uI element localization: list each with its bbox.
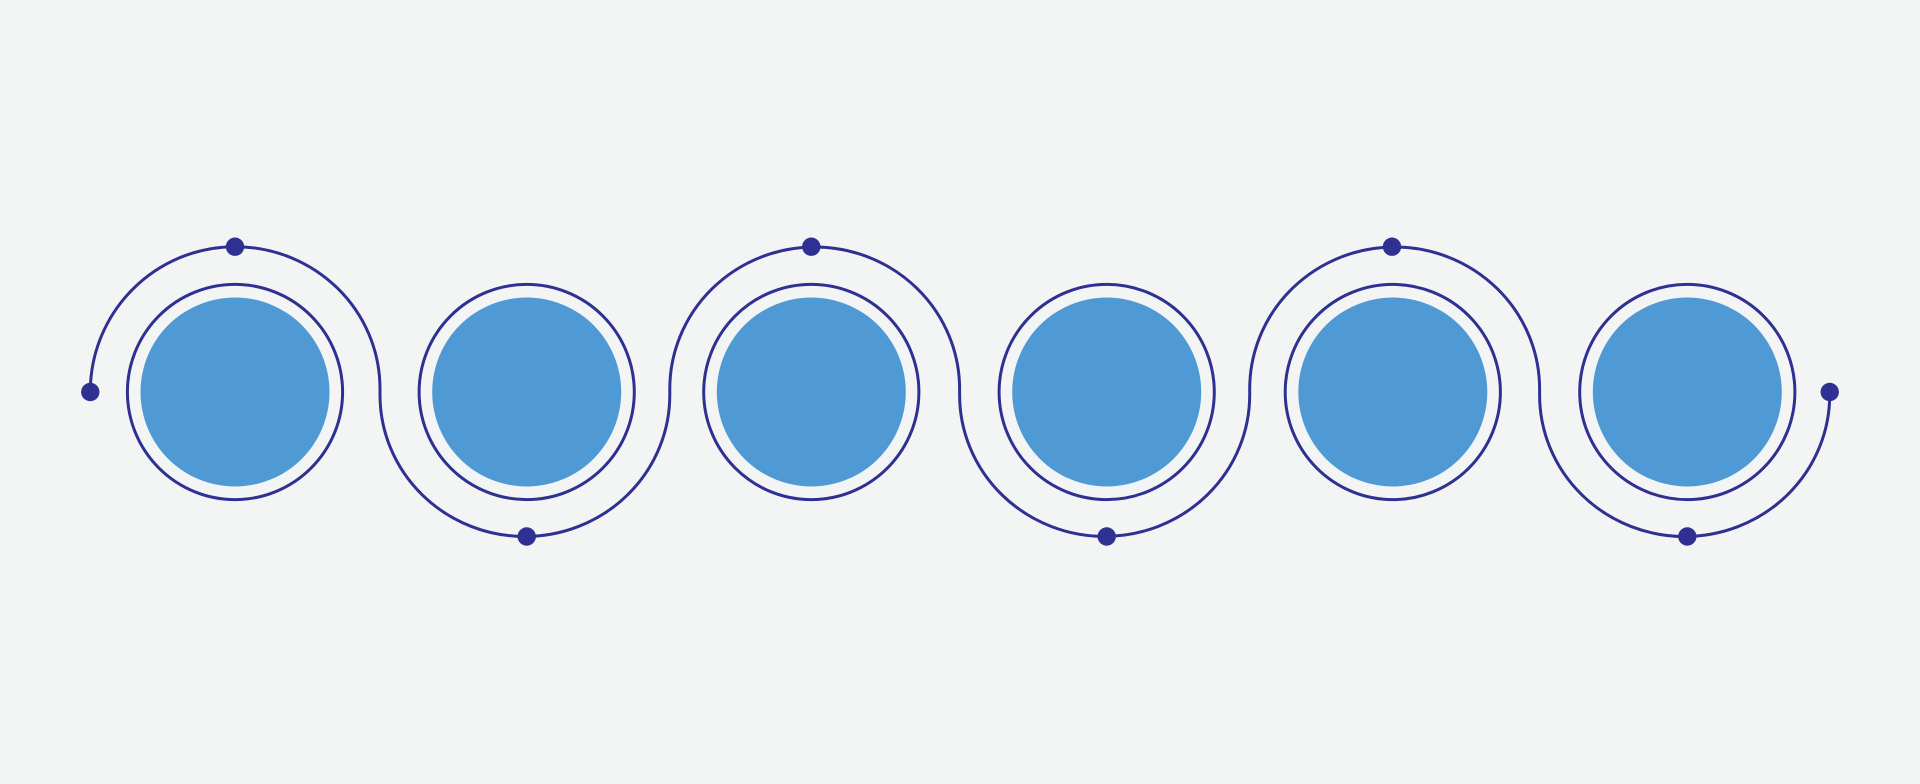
step 6 blue disc [1593,298,1782,486]
step 4 outer ring [999,284,1214,500]
step 2 outer ring [419,284,634,500]
bottom dot 4 [1098,527,1116,546]
bottom dot 2 [518,527,536,546]
winding connector line [90,247,1830,536]
step 1 circle [127,284,343,500]
step 6 outer ring [1580,284,1795,500]
step 6 circle [1580,284,1795,500]
top dot 3 [802,238,820,256]
step 5 circle [1285,284,1500,500]
bottom dot 6 [1678,527,1697,546]
step 2 circle [419,284,634,500]
step 3 circle [704,284,919,500]
step 5 outer ring [1285,284,1500,500]
start dot [81,383,100,401]
step 4 circle [999,284,1214,500]
step 5 blue disc [1298,298,1487,486]
step 3 blue disc [717,298,906,486]
top dot 1 [226,238,244,256]
connector dots [81,238,1839,546]
step 1 blue disc [140,298,330,486]
step 1 outer ring [127,284,343,500]
step 3 outer ring [704,284,919,500]
step 2 blue disc [432,298,621,486]
top dot 5 [1383,238,1401,256]
step 4 blue disc [1012,298,1201,486]
end dot [1820,383,1839,401]
